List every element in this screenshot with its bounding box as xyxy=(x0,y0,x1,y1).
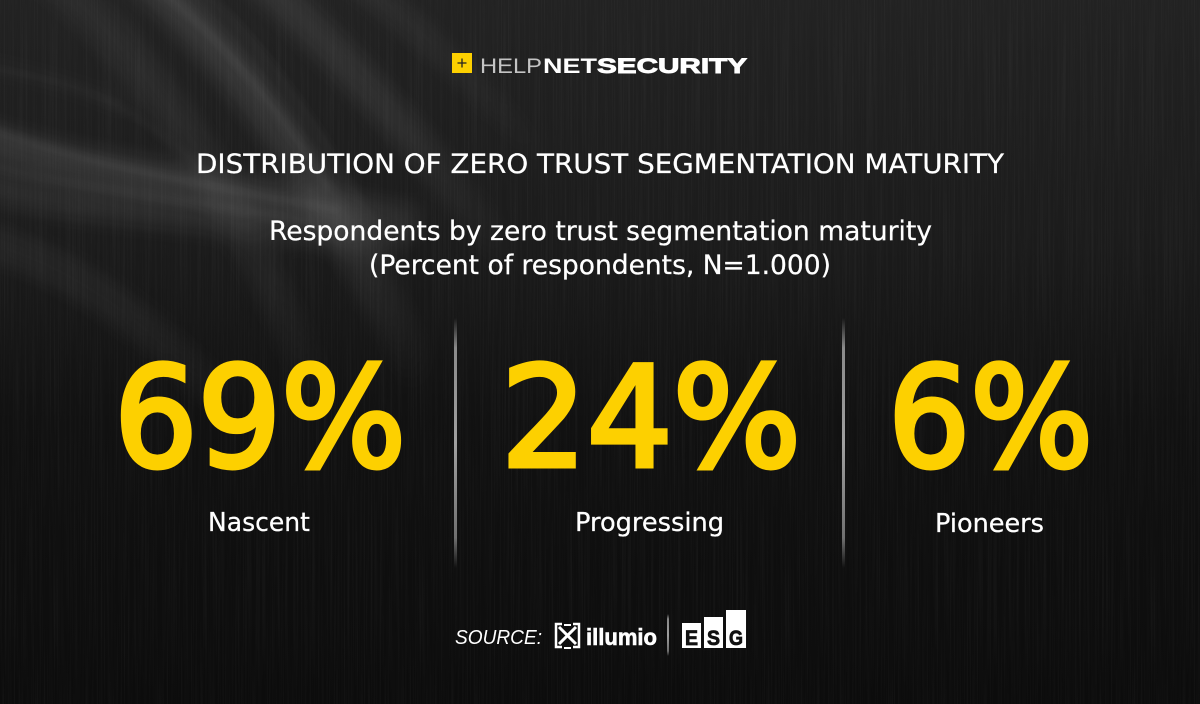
source label: SOURCE: xyxy=(455,627,542,649)
logo wordmark: HELP xyxy=(480,55,542,78)
ESG logo: E xyxy=(685,627,698,650)
label: Progressing xyxy=(575,508,724,538)
label: Pioneers xyxy=(935,509,1044,539)
value: 24% xyxy=(501,337,801,499)
value: 69% xyxy=(114,337,406,499)
subtitle: (Percent of respondents, N=1.000) xyxy=(369,250,831,281)
logo wordmark: SECURITY xyxy=(597,55,747,78)
logo wordmark xyxy=(480,55,747,78)
divider xyxy=(667,614,669,656)
divider xyxy=(842,318,845,568)
icon: illumio mark xyxy=(556,624,579,648)
label: Nascent xyxy=(208,508,310,538)
subtitle: Respondents by zero trust segmentation maturity xyxy=(269,216,932,247)
divider xyxy=(454,318,457,568)
background xyxy=(0,0,1200,454)
illumio wordmark: illumio xyxy=(586,624,657,650)
ESG logo xyxy=(682,610,746,650)
stat: 24% Progressing xyxy=(501,337,801,538)
stat: 69% Nascent xyxy=(114,337,406,538)
logo: Help Net Security xyxy=(452,53,747,78)
subtitle xyxy=(269,216,932,281)
title: DISTRIBUTION OF ZERO TRUST SEGMENTATION MATURITY xyxy=(196,149,1005,180)
stat: 6% Pioneers xyxy=(888,337,1093,539)
ESG logo: G xyxy=(729,627,743,650)
source line xyxy=(455,610,746,656)
icon: yellow plus square xyxy=(452,53,472,73)
logo wordmark: NET xyxy=(543,55,597,78)
value: 6% xyxy=(888,337,1093,499)
ESG logo: S xyxy=(707,627,720,650)
